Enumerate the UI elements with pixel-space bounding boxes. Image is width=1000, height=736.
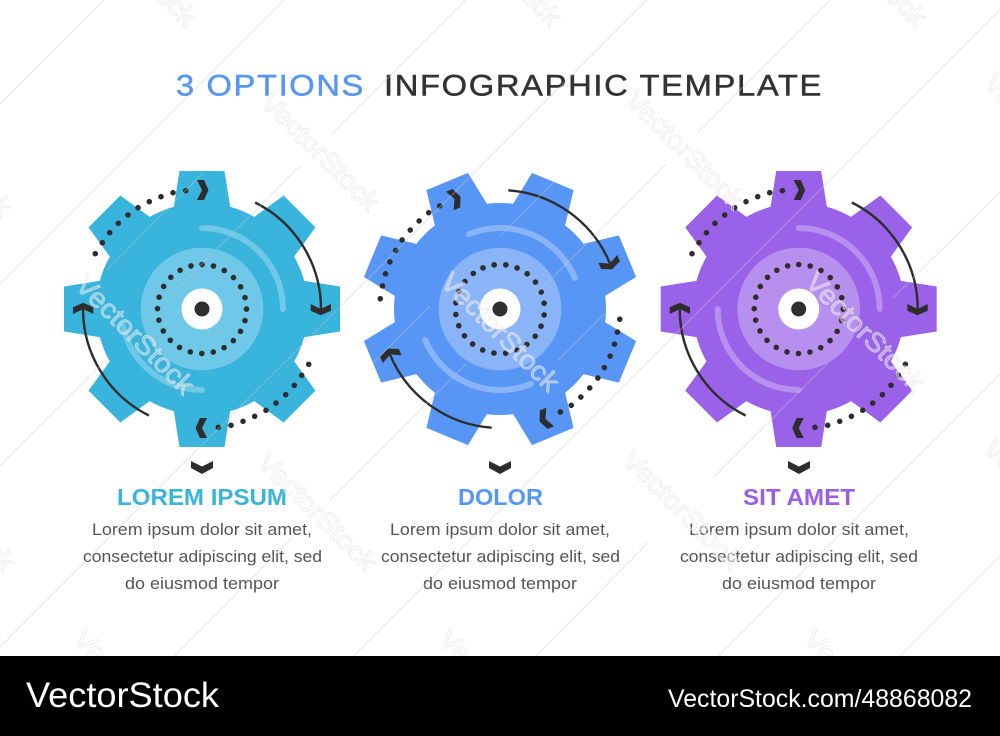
- gear 2 dotted arrow bottom: [515, 319, 648, 431]
- gear 1 light arc lower left: [123, 326, 202, 390]
- option 2 description: do eiusmod tempor: [423, 574, 577, 593]
- gear 3 dotted arrow bottom: [792, 364, 905, 438]
- gear 1 hub: [182, 288, 222, 330]
- gear 3 arrow right: [852, 202, 928, 315]
- gear 3 light arc lower left: [718, 309, 799, 390]
- footer bar: [0, 656, 1000, 736]
- option 3 description: Lorem ipsum dolor sit amet,: [689, 520, 909, 539]
- watermarks: VectorStock: [617, 445, 748, 576]
- gear 2 arrow left: [378, 324, 492, 457]
- gear 1: cyan: [64, 171, 340, 447]
- option 2 description: [381, 520, 620, 593]
- option 3 description: consectetur adipiscing elit, sed: [680, 547, 918, 566]
- title: 3 OPTIONS: [176, 70, 365, 102]
- gear 1 light arc upper right: [202, 228, 283, 309]
- option 2 text block: [381, 461, 620, 593]
- gear 3 dotted ring: [754, 264, 843, 354]
- footer logo: VectorStock: [26, 676, 220, 715]
- option 3 heading: SIT AMET: [743, 484, 855, 510]
- gear 2 arrow right: [508, 161, 622, 294]
- option 1 description: do eiusmod tempor: [125, 574, 279, 593]
- watermarks: VectorStock: [252, 447, 383, 578]
- watermarks: VectorStock: [70, 270, 201, 401]
- icon: chevron down 1: [191, 461, 213, 474]
- option 3 text block: [680, 461, 918, 593]
- footer url: VectorStock.com/48868082: [668, 685, 972, 713]
- gear 1 dotted ring: [158, 264, 246, 354]
- watermarks: VectorStock: [255, 87, 386, 218]
- option 2 description: consectetur adipiscing elit, sed: [381, 547, 620, 566]
- gear 2 inner light disc: [420, 229, 580, 389]
- gear 3 arrow left: [670, 303, 746, 416]
- option 3 description: [680, 520, 918, 593]
- gear 2 body with teeth: [320, 129, 680, 489]
- gear 1 body with teeth: [64, 171, 340, 447]
- gear 1 inner light disc: [141, 248, 263, 370]
- option 1 heading: LOREM IPSUM: [117, 484, 287, 510]
- title: INFOGRAPHIC TEMPLATE: [384, 70, 823, 102]
- gear 2: blue: [320, 129, 680, 489]
- gear 1 dotted arrow top: [95, 180, 208, 254]
- watermarks: VectorStock: [435, 267, 566, 398]
- option 1 description: [83, 520, 322, 593]
- gear 3 hub: [778, 288, 819, 330]
- option 1 description: consectetur adipiscing elit, sed: [83, 547, 322, 566]
- option 1 description: Lorem ipsum dolor sit amet,: [92, 520, 312, 539]
- gear 1 arrow right: [255, 202, 331, 315]
- gear 3: purple: [661, 171, 937, 447]
- title: [176, 70, 823, 102]
- gear 2 light arc lower left: [425, 309, 531, 415]
- gear 1 dotted arrow bottom: [196, 364, 309, 438]
- icon: chevron down 3: [788, 461, 810, 474]
- icon: chevron down 2: [489, 461, 511, 474]
- gear 2 dotted arrow top: [352, 187, 485, 299]
- watermarks: VectorStock: [620, 85, 751, 216]
- gear 2 dotted ring: [442, 251, 558, 367]
- option 3 description: do eiusmod tempor: [722, 574, 876, 593]
- option 2 description: Lorem ipsum dolor sit amet,: [390, 520, 610, 539]
- gear 3 dotted arrow top: [692, 180, 805, 254]
- option 2 heading: DOLOR: [458, 484, 543, 510]
- gear 3 inner light disc: [737, 248, 860, 370]
- option 1 text block: [83, 461, 322, 593]
- gear 3 light arc upper right: [799, 228, 880, 309]
- gear 2 hub: [473, 282, 527, 336]
- watermarks: VectorStock: [800, 267, 931, 398]
- gear 1 arrow left: [73, 303, 149, 416]
- gear 2 light arc upper right: [469, 203, 575, 309]
- gear 3 body with teeth: [661, 171, 937, 447]
